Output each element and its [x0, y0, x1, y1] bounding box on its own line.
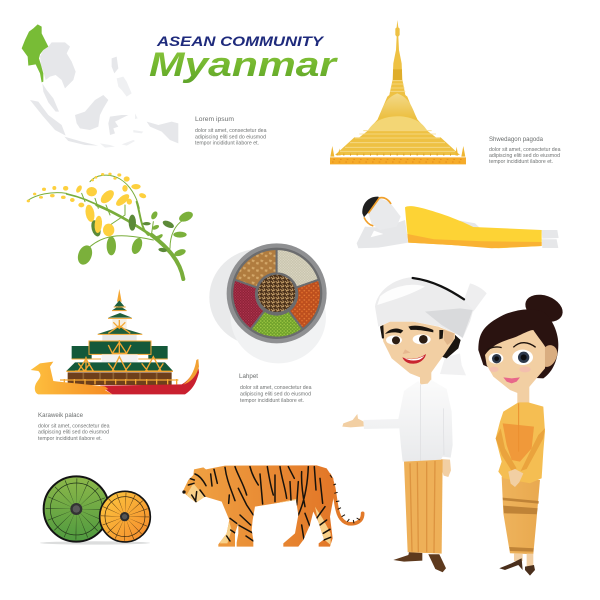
text block: Karaweik palace: adipiscing eliti sed do eiusmod [38, 430, 109, 436]
lower roof [66, 362, 173, 371]
chart: lahpet plate [209, 243, 327, 363]
legs [514, 554, 533, 567]
bird prow [31, 362, 112, 394]
hand [342, 414, 364, 427]
shoes [393, 552, 446, 572]
mouth [402, 354, 426, 364]
icon: padauk flower branch [27, 173, 194, 279]
man: body [342, 372, 453, 572]
arm and feet in grey [357, 220, 559, 248]
middle green tier [72, 346, 168, 359]
woman: head [478, 290, 566, 394]
centre bowl [256, 273, 297, 314]
hull [100, 360, 199, 394]
text block: Lorem ipsum [195, 116, 267, 146]
hands [508, 469, 523, 487]
hall [68, 372, 172, 385]
plate rim [227, 243, 327, 343]
man: head [375, 277, 487, 379]
text block: Lahpet: dolor sit amet, consectetur dea [240, 385, 312, 391]
text block: Karaweik palace: tempor incididunt ilabore et. [38, 436, 102, 442]
text block: Shwedagon pagoda: adipiscing eliti sed do eiusmod [489, 153, 560, 159]
robe [405, 206, 542, 248]
text block: Shwedagon pagoda: dolor sit amet, consectetur dea [489, 147, 561, 153]
sarong [404, 460, 443, 554]
skirt [502, 477, 540, 554]
stripes [188, 467, 331, 542]
shirt [363, 380, 453, 462]
head [362, 197, 380, 217]
text block: Shwedagon pagoda: Shwedagon pagoda [489, 136, 543, 143]
face [485, 330, 547, 394]
upper tiers [112, 319, 127, 330]
body [183, 465, 335, 547]
text block: Lahpet [239, 373, 312, 404]
text block: Lorem ipsum: dolor sit amet, consectetur dea [195, 128, 267, 134]
text block: Karaweik palace [38, 412, 110, 442]
stems [28, 175, 183, 279]
text block: Shwedagon pagoda: tempor incididunt ilabore et. [489, 159, 553, 165]
text block: Karaweik palace: dolor sit amet, consectetur dea [38, 424, 110, 430]
right hand [441, 459, 451, 477]
icon: tiger [182, 465, 363, 547]
green umbrella [44, 476, 109, 542]
blouse [496, 402, 545, 483]
shoes [499, 558, 535, 576]
illustration: woman in traditional dress [478, 290, 566, 576]
text block: Karaweik palace: Karaweik palace [38, 412, 83, 419]
map: grey neighbouring countries [30, 42, 178, 148]
ear [545, 345, 557, 367]
text block: Lahpet: Lahpet [239, 373, 258, 380]
text block: Lahpet: adipiscing eliti sed do eiusmod [240, 392, 311, 398]
icon: Pathein umbrellas [40, 476, 150, 545]
tail [329, 475, 363, 524]
heading: Myanmar: Myanmar [149, 46, 338, 84]
plate shadows [209, 249, 309, 346]
icon: Shwedagon pagoda [330, 20, 466, 164]
hair back [478, 309, 558, 378]
map: Southeast Asia with Myanmar highlighted [22, 24, 178, 148]
hair back [442, 333, 461, 358]
text block: Lahpet: tempor incididunt ilabore et. [240, 398, 304, 404]
text block: Shwedagon pagoda [489, 136, 561, 165]
text block: Lorem ipsum: Lorem ipsum [195, 116, 235, 123]
woman: body [496, 385, 545, 576]
nose [403, 349, 411, 354]
hair bun [521, 290, 566, 327]
leaves [75, 210, 194, 267]
knot behind head [440, 353, 466, 375]
neck [517, 385, 529, 405]
spire [117, 289, 122, 302]
turban [463, 283, 487, 312]
orange umbrella [100, 491, 150, 542]
icon: Karaweik palace barge [31, 289, 199, 394]
illustration: man in traditional dress [342, 277, 487, 572]
five lahpet compartments [232, 249, 321, 338]
ear and side hair [444, 330, 454, 345]
icon: reclining Buddha [357, 197, 559, 248]
text block: Lorem ipsum: tempor incididunt ilabore et. [195, 140, 259, 146]
cheeks [489, 367, 499, 372]
title: ASEAN community Myanmar [149, 33, 338, 84]
mouth [503, 377, 520, 383]
yellow blossoms [27, 173, 147, 236]
map: Myanmar in green [22, 24, 48, 82]
neck [420, 372, 431, 388]
text block: Lorem ipsum: adipiscing eliti sed do eiusmod [195, 134, 266, 140]
brows and eyes [385, 326, 433, 334]
heading: ASEAN COMMUNITY: ASEAN COMMUNITY [156, 33, 325, 49]
brows and eyes [487, 343, 536, 350]
face [381, 322, 455, 379]
